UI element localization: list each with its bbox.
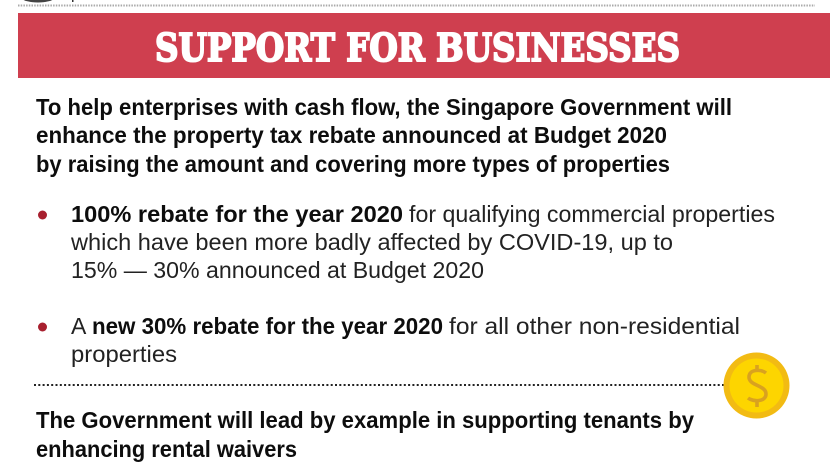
bullet: 100% rebate: for qualifying commercial properties	[409, 201, 775, 227]
bullet: new 30% rebate: new 30% rebate for the year 2020	[92, 313, 443, 339]
bullet: 100% rebate	[38, 201, 775, 283]
bullet: new 30% rebate: properties	[71, 341, 177, 367]
title: SUPPORT FOR BUSINESSES	[155, 25, 680, 70]
title banner	[18, 13, 830, 78]
intro text	[36, 94, 732, 177]
bullet: new 30% rebate: for all other non-residential	[449, 313, 740, 339]
intro text: To help enterprises with cash flow, the Singapore Government will	[36, 94, 732, 120]
intro text: enhance the property tax rebate announced at Budget 2020	[36, 122, 667, 148]
intro text: by raising the amount and covering more types of properties	[36, 151, 670, 177]
bullet: 100% rebate: which have been more badly affected by COVID-19, up to	[70, 229, 673, 255]
closing statement: enhancing rental waivers	[36, 436, 297, 462]
closing statement	[36, 407, 694, 462]
bullet: 100% rebate: 100% rebate for the year 2020	[71, 201, 403, 227]
bullet: 100% rebate: 15% — 30% announced at Budget 2020	[71, 257, 484, 283]
logo remnant	[22, 0, 74, 2]
bullet: new 30% rebate: A	[71, 313, 87, 339]
closing statement: The Government will lead by example in supporting tenants by	[36, 407, 694, 433]
bullet: new 30% rebate	[38, 313, 740, 367]
icon: gold coin	[724, 352, 790, 418]
